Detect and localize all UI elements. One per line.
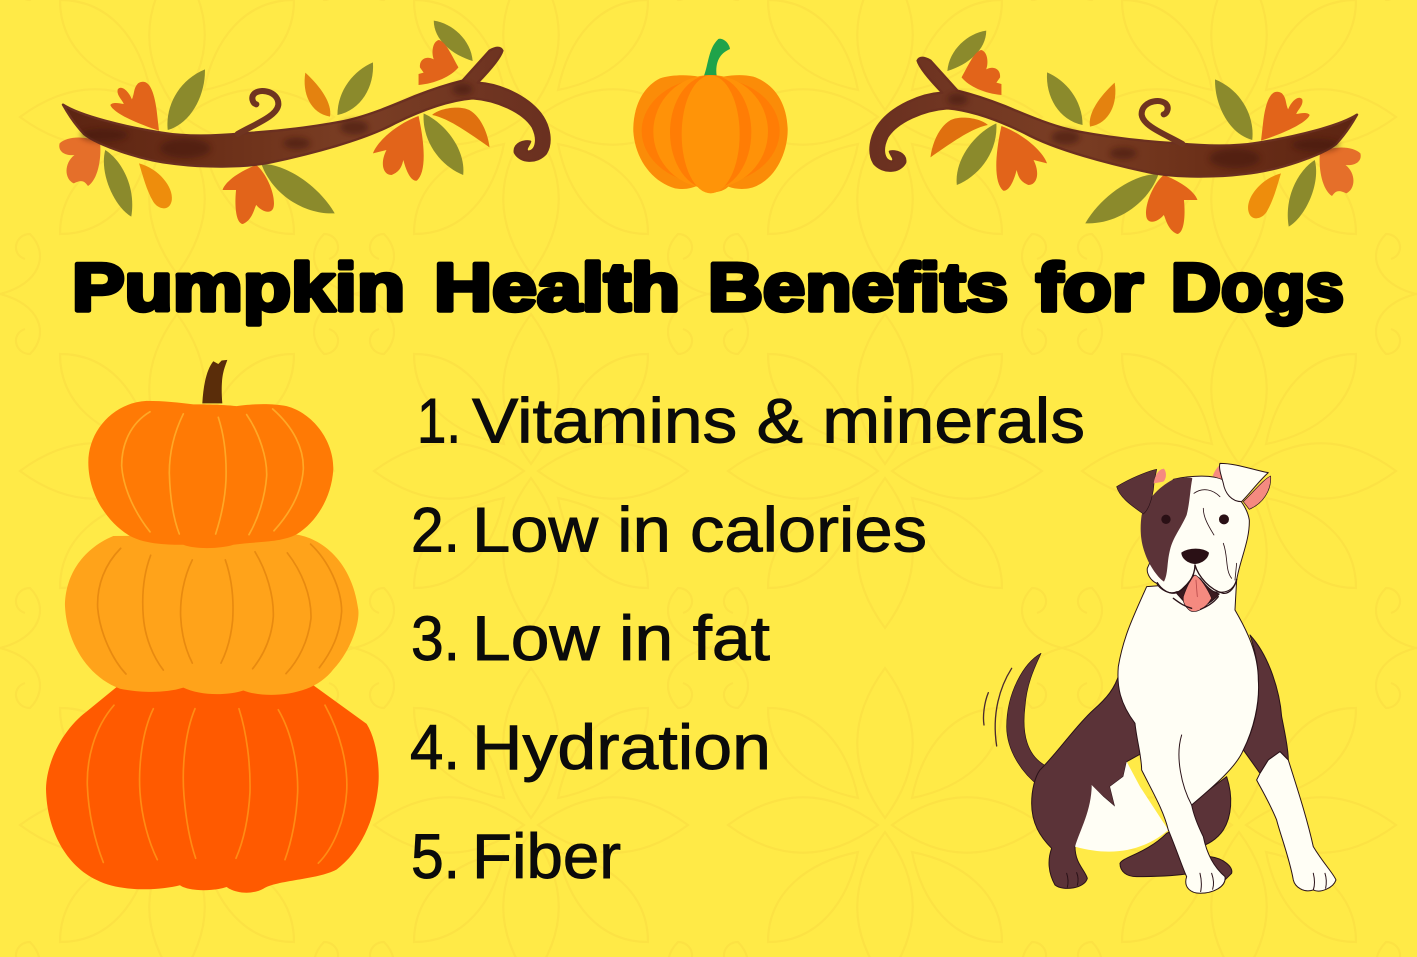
tail — [1007, 653, 1047, 787]
tongue — [1183, 575, 1212, 612]
eyes — [1161, 514, 1229, 524]
title: Pumpkin — [72, 250, 405, 326]
rear body — [1032, 673, 1142, 888]
item 1: Vitamins & minerals — [472, 386, 1085, 456]
far shoulder — [1243, 635, 1288, 773]
item 2: 2. — [411, 496, 460, 566]
bottom pumpkin — [46, 685, 379, 893]
item 4: Hydration — [472, 713, 771, 783]
item 5: 5. — [411, 822, 460, 892]
title: for — [1036, 250, 1143, 326]
item 3: Low in fat — [472, 604, 771, 674]
item 2: Low in calories — [472, 496, 927, 566]
item 4: 4. — [410, 713, 460, 783]
nose — [1181, 549, 1209, 564]
left autumn branch — [59, 21, 550, 224]
illustration: stacked pumpkins — [46, 360, 379, 893]
item 1: 1. — [417, 386, 461, 456]
title: Dogs — [1171, 250, 1344, 326]
item 5: Fiber — [472, 822, 621, 892]
mouth — [1177, 575, 1219, 609]
numbered list — [410, 386, 1085, 892]
right ear — [1213, 463, 1271, 509]
icon: small top pumpkin — [633, 39, 788, 193]
far white leg — [1257, 752, 1336, 891]
head dark patch — [1141, 478, 1192, 582]
tail wag lines — [984, 668, 1012, 746]
white belly — [1075, 762, 1168, 852]
top pumpkin — [88, 401, 333, 548]
top pumpkin stem — [202, 360, 227, 403]
title — [72, 250, 1344, 326]
leg and toe lines — [1067, 735, 1326, 892]
chest and front leg — [1118, 580, 1259, 893]
middle pumpkin — [65, 534, 358, 695]
title: Health — [434, 250, 680, 326]
item 5 — [411, 822, 621, 892]
head white — [1147, 476, 1249, 593]
left ear — [1117, 469, 1166, 514]
forehead wrinkles — [1194, 490, 1237, 580]
title: Benefits — [708, 250, 1008, 326]
back haunch and paws — [1120, 777, 1232, 880]
right autumn branch — [870, 31, 1361, 234]
item 3: 3. — [411, 604, 460, 674]
illustration: sitting dog — [984, 463, 1336, 893]
muzzle lines — [1157, 565, 1237, 609]
